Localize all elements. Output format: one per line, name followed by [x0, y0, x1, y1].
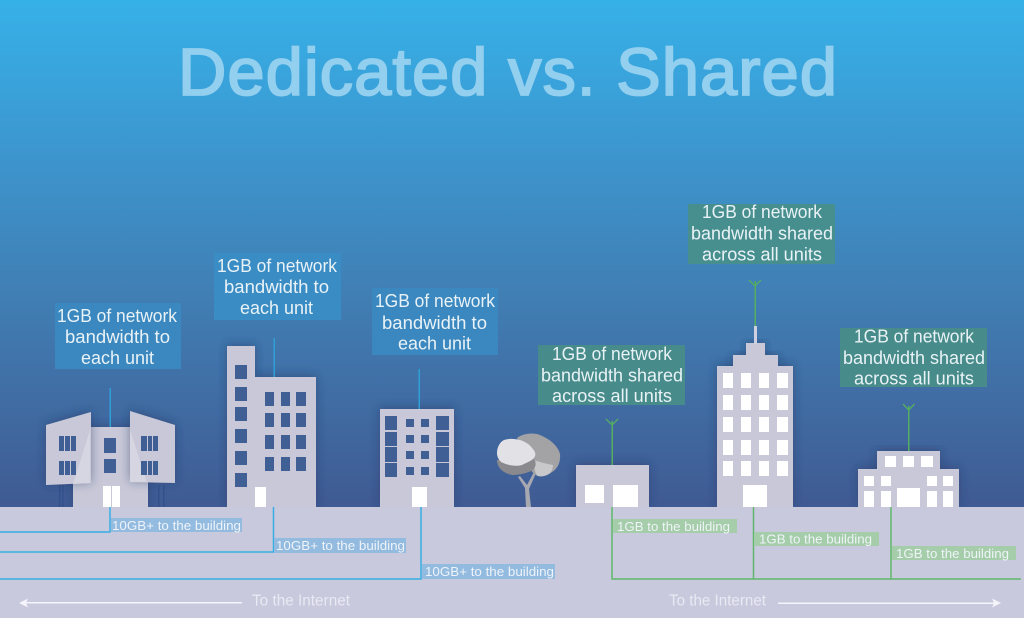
building 2: dedicated tower with annex [227, 338, 316, 507]
label: dedicated 3 [372, 288, 498, 355]
building 5: shared skyscraper [717, 280, 793, 507]
label: dedicated 2: 1GB of network [217, 256, 338, 276]
label: shared 3: across all units [854, 368, 974, 388]
label: shared 2 [688, 202, 835, 264]
label: dedicated 2 [214, 253, 341, 320]
label: dedicated 2: each unit [240, 298, 313, 318]
tag: 10GB+ building 2: 10GB+ to the building [276, 538, 405, 553]
tag: 1GB building 5: 1GB to the building [759, 532, 872, 546]
label: dedicated 3: bandwidth to [382, 313, 487, 333]
label: shared 2: 1GB of network [702, 202, 823, 222]
text: to the internet left: To the Internet [252, 592, 351, 610]
label: shared 3 [840, 326, 987, 388]
tag: 1GB building 6: 1GB to the building [896, 546, 1009, 561]
tag: 10GB+ building 1: 10GB+ to the building [112, 518, 241, 533]
tag: 10GB+ building 3: 10GB+ to the building [425, 564, 554, 579]
label: shared 1: 1GB of network [552, 344, 673, 364]
label: shared 3: 1GB of network [854, 326, 975, 346]
label: shared 3: bandwidth shared [843, 348, 985, 368]
building 4: shared low-rise [576, 419, 649, 507]
building 3: dedicated mid-rise [380, 369, 454, 507]
icon: tree [497, 434, 560, 507]
label: dedicated 1: bandwidth to [65, 327, 170, 347]
label: dedicated 3: each unit [398, 334, 471, 354]
title: Dedicated vs. Shared [178, 35, 837, 110]
label: shared 1 [538, 344, 685, 406]
text: to the internet right: To the Internet [669, 592, 767, 610]
label: shared 2: across all units [702, 244, 822, 264]
label: shared 2: bandwidth shared [691, 224, 833, 244]
label: dedicated 3: 1GB of network [375, 291, 496, 311]
ground strip [0, 507, 1024, 618]
label: dedicated 1: each unit [81, 348, 154, 368]
arrow: right to the internet [778, 598, 1001, 608]
dedicated connection lines [0, 507, 421, 579]
label: dedicated 2: bandwidth to [224, 277, 329, 297]
shared connection lines [612, 507, 1021, 579]
arrow: left to the internet [19, 598, 242, 608]
tag: 1GB building 4: 1GB to the building [617, 519, 730, 534]
building 1: dedicated winged building [46, 388, 175, 507]
label: dedicated 1 [55, 303, 181, 369]
building 6: shared stepped building [858, 404, 959, 507]
label: shared 1: across all units [552, 386, 672, 406]
label: shared 1: bandwidth shared [541, 366, 683, 386]
label: dedicated 1: 1GB of network [57, 306, 178, 326]
